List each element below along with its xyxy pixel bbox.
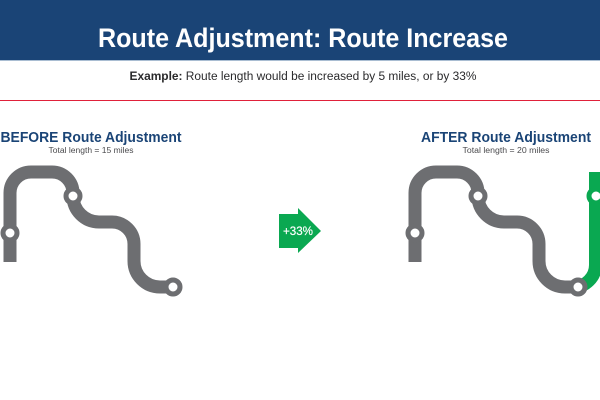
new green station bbox=[589, 189, 600, 203]
after stations bbox=[408, 189, 585, 294]
after total length: Total length = 20 miles bbox=[462, 146, 550, 155]
before route line bbox=[10, 172, 173, 287]
panel: before route bbox=[0, 130, 182, 294]
before heading: BEFORE Route Adjustment bbox=[0, 130, 182, 146]
after route line bbox=[415, 172, 578, 287]
example text: Example: Route length would be increased by 5 miles, or by 33% bbox=[130, 71, 476, 83]
header banner bbox=[0, 0, 600, 61]
title: Route Adjustment: Route Increase bbox=[98, 23, 508, 53]
added green route segment bbox=[574, 172, 596, 287]
before total length: Total length = 15 miles bbox=[48, 146, 134, 155]
after heading: AFTER Route Adjustment bbox=[421, 130, 591, 146]
panel: after route bbox=[408, 130, 600, 294]
before stations bbox=[3, 189, 180, 294]
arrow: +33%: +33% bbox=[283, 224, 313, 238]
arrow: +33% bbox=[279, 208, 321, 253]
